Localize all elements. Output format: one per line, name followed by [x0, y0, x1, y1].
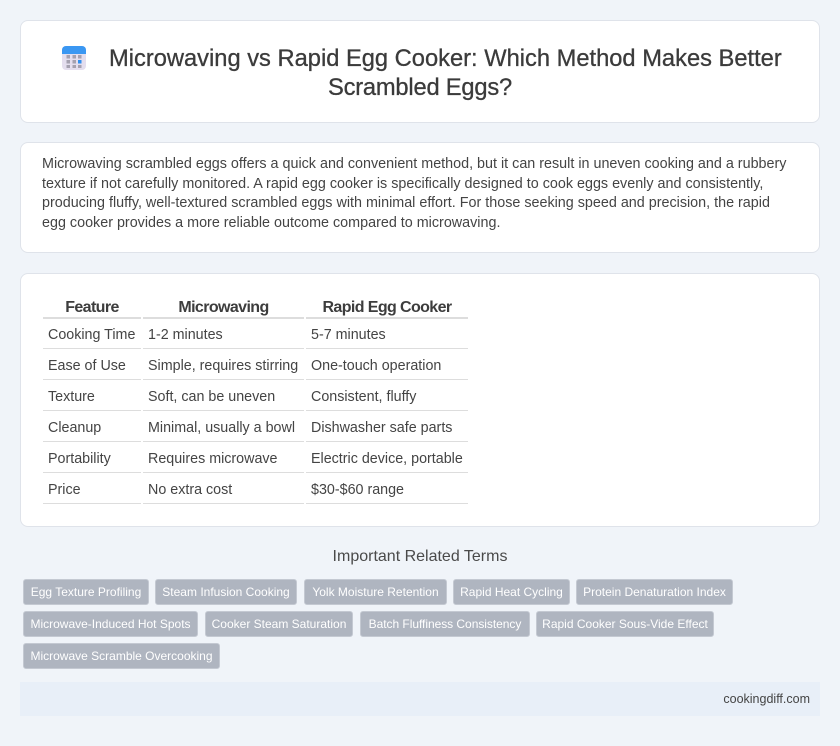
comparison table: 1-2 minutes — [148, 327, 223, 343]
comparison table: Electric device, portable — [311, 451, 463, 467]
related term tags: Egg Texture Profiling — [31, 585, 141, 599]
related term tags — [23, 579, 733, 669]
table header: Feature — [65, 299, 119, 316]
comparison table: Price — [48, 482, 81, 498]
intro text: Microwaving scrambled eggs offers a quick and convenient method, but it can result in uneven cooking and a rubbery — [42, 156, 786, 172]
comparison table: One-touch operation — [311, 358, 441, 374]
icon: calendar — [62, 46, 86, 70]
title — [109, 46, 782, 101]
related term tags: Rapid Heat Cycling — [460, 585, 563, 599]
comparison table: Simple, requires stirring — [148, 358, 298, 374]
comparison table: Minimal, usually a bowl — [148, 420, 295, 436]
related term tags: Microwave Scramble Overcooking — [30, 649, 213, 663]
related term tags: Cooker Steam Saturation — [212, 617, 346, 631]
title: Scrambled Eggs? — [328, 75, 512, 101]
header panel — [20, 20, 820, 123]
title: Microwaving vs Rapid Egg Cooker: Which Method Makes Better — [109, 46, 782, 72]
intro text — [42, 156, 786, 231]
intro panel — [20, 142, 820, 253]
related term tags: Batch Fluffiness Consistency — [369, 617, 521, 631]
comparison table: Ease of Use — [48, 358, 126, 374]
related term tags: Protein Denaturation Index — [583, 585, 726, 599]
table header: Microwaving — [178, 299, 269, 316]
intro text: egg cooker provides a more reliable outcome compared to microwaving. — [42, 215, 500, 231]
comparison table: Cooking Time — [48, 327, 135, 343]
comparison table: Requires microwave — [148, 451, 278, 467]
table panel — [20, 273, 820, 527]
comparison table — [43, 299, 468, 504]
related term tags: Rapid Cooker Sous-Vide Effect — [542, 617, 708, 631]
related term tags: Microwave-Induced Hot Spots — [30, 617, 191, 631]
table header — [43, 299, 468, 319]
footer bar — [20, 682, 820, 716]
comparison table: Consistent, fluffy — [311, 389, 416, 405]
table header: Rapid Egg Cooker — [322, 299, 452, 316]
comparison table: Dishwasher safe parts — [311, 420, 452, 436]
related term tags: Steam Infusion Cooking — [162, 585, 290, 599]
comparison table: Texture — [48, 389, 95, 405]
comparison table: Soft, can be uneven — [148, 389, 275, 405]
footer source: cookingdiff.com — [723, 692, 810, 706]
related term tags: Yolk Moisture Retention — [312, 585, 439, 599]
comparison table: $30-$60 range — [311, 482, 404, 498]
comparison table: Portability — [48, 451, 111, 467]
intro text: texture if not carefully monitored. A rapid egg cooker is specifically designed to cook eggs evenly and consistently, — [42, 176, 763, 192]
comparison table: No extra cost — [148, 482, 232, 498]
related terms heading: Important Related Terms — [333, 548, 507, 565]
intro text: producing fluffy, well-textured scrambled eggs with minimal effort. For those seeking speed and precision, the rapid — [42, 195, 770, 211]
comparison table: 5-7 minutes — [311, 327, 386, 343]
comparison table: Cleanup — [48, 420, 101, 436]
